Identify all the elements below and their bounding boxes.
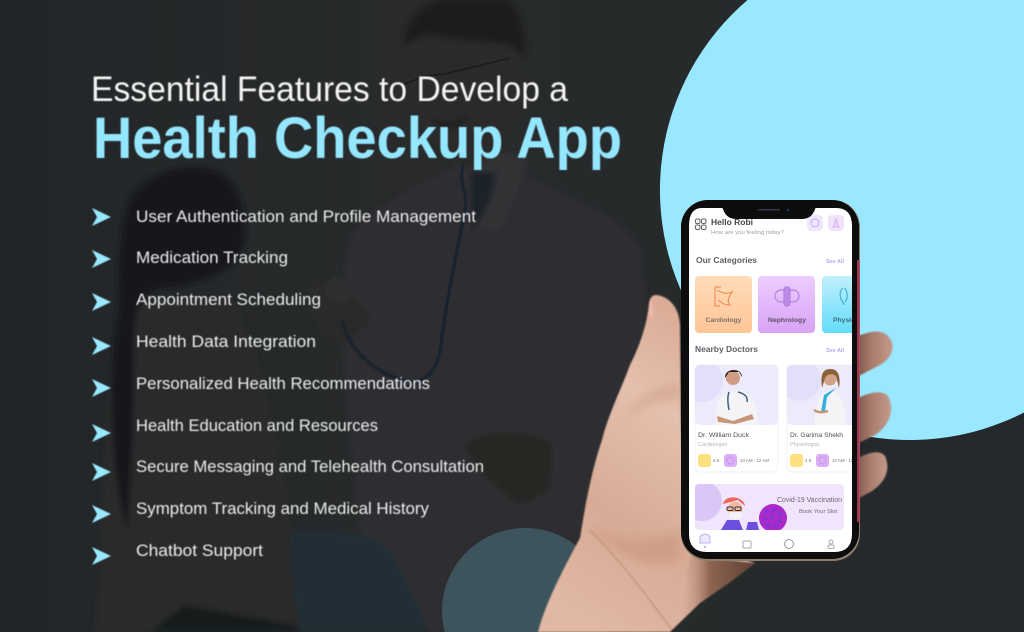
doctor card 2: Dr. Garima Shekh [790,432,843,439]
chat icon [784,540,794,548]
teal circle [442,528,608,632]
palm under phone shadow [680,556,755,622]
nephrology card: Nephrology [768,317,806,324]
phone screen [689,208,852,552]
categories heading: See All [826,259,845,265]
feature list [92,208,484,565]
doctor card 2: 4.9 [805,458,812,463]
doctor card 1 [694,364,778,472]
hand holding phone [538,295,893,632]
item 1: User Authentication and Profile Management [136,208,476,226]
nearby doctors heading: Nearby Doctors [695,344,758,354]
speaker [758,209,780,210]
title [91,70,622,171]
item 8: Symptom Tracking and Medical History [136,500,430,518]
doctor smile [428,115,470,129]
doctor card 1: Dr. William Duck [698,432,750,439]
vaccination banner: Covid-19 Vaccination [777,497,842,504]
girl lower garment [150,605,300,632]
doctor face [408,40,522,168]
doctor hand with chest piece [309,282,372,345]
wrist crease [590,530,672,630]
virus [759,504,787,532]
doctor hair [405,0,524,58]
chest piece [325,277,351,303]
palm crease shading [585,385,680,565]
vaccination banner: Book Your Slot [799,509,837,515]
finger 1 [850,332,893,378]
title line 2: Health Checkup App [93,106,622,171]
item 9 [92,542,263,565]
title line 1: Essential Features to Develop a [91,70,569,109]
vaccination banner [695,484,844,530]
doctor shirt [456,150,528,232]
thumbnail [649,299,653,318]
girl shirt [95,300,375,632]
phone body [681,200,860,561]
item 7: Secure Messaging and Telehealth Consultation [136,458,484,476]
item 3: Appointment Scheduling [136,291,321,309]
palm and thumb [538,295,755,632]
categories heading: Our Categories [696,255,757,265]
item 8 [92,500,430,523]
doctor card 2: 10 AM - 12 AM [832,458,861,463]
doctor tie [470,172,496,233]
physiology card [822,276,852,333]
doctor portrait [814,369,845,425]
item 4 [92,333,316,355]
doctor card 1: 4.9 [713,458,720,463]
item 4: Health Data Integration [136,333,316,351]
stethoscope [342,165,466,381]
doctor card 2 [786,364,852,472]
doctor portrait [716,370,757,425]
cardiology card: Cardiology [706,317,742,324]
doctor white coat [343,165,652,632]
girl hair [112,167,245,530]
doctor card 1: 10 AM - 12 AM [740,458,769,463]
cyan circle [660,0,1024,440]
item 9: Chatbot Support [136,542,263,560]
phone notch [722,206,816,219]
mascot [721,497,759,530]
doctor card 1: Cardiologist [698,442,728,448]
categories heading [696,257,844,264]
home icon [700,534,710,548]
camera [787,209,789,211]
item 7 [92,458,484,481]
finger 2 [850,392,891,447]
nephrology card [758,276,815,333]
smartphone [681,200,879,561]
item 5: Personalized Health Recommendations [136,375,430,393]
bell button [828,215,844,231]
nearby doctors heading: See All [826,348,845,354]
doctor card 2: Physiologist [790,442,820,448]
bottom navigation [700,534,834,549]
girl jeans [290,530,430,632]
menu icon [696,219,706,230]
physiology card: Physiology [833,317,869,324]
doctor glasses [402,58,510,85]
item 2: Medication Tracking [136,249,288,267]
cardiology card [695,276,752,333]
nearby doctors heading [696,346,844,354]
greeting subtitle: How are you feeling today? [711,230,784,236]
item 6 [92,417,378,442]
search button [807,215,823,231]
calendar icon [743,541,751,548]
finger 3 [850,452,887,503]
doctor hand [465,433,552,505]
item 6: Health Education and Resources [136,417,378,435]
profile icon [828,540,834,548]
greeting: Hello Robi [711,218,753,227]
app header [696,215,844,236]
